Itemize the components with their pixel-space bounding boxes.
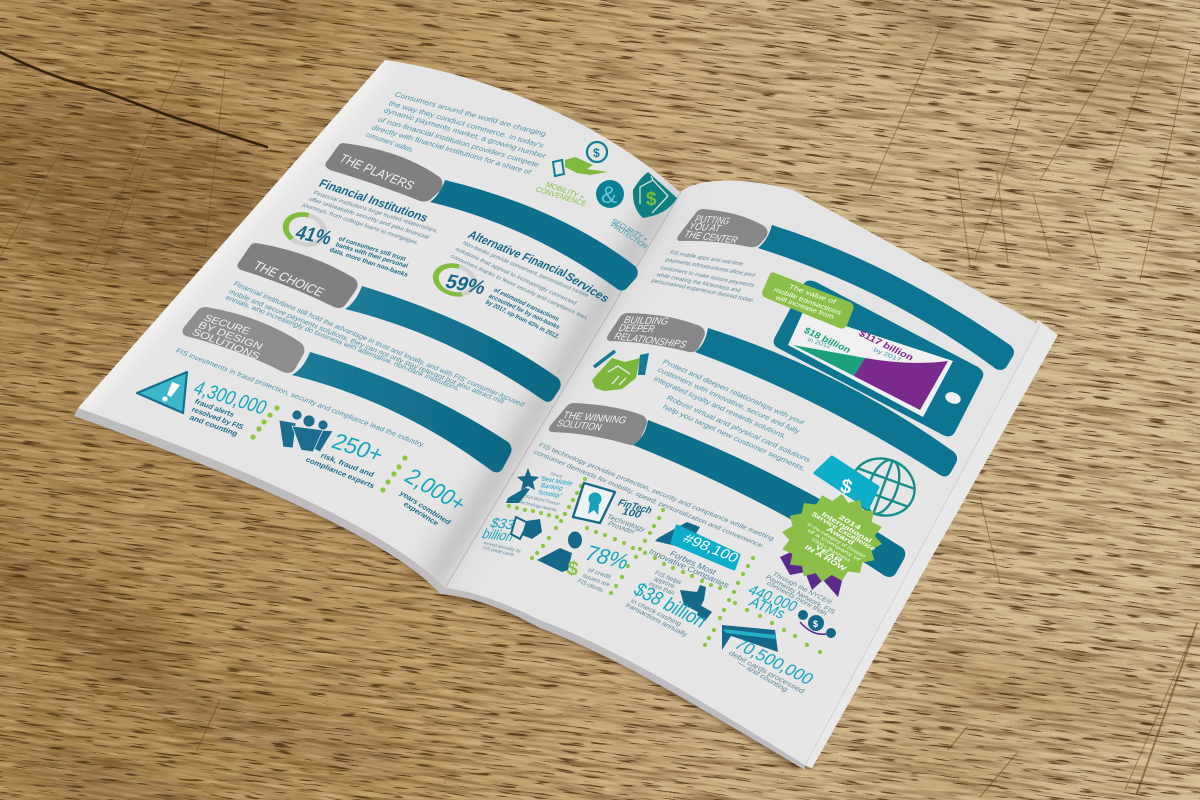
badge text: Award — [825, 526, 855, 547]
stat: 33 billion moved by credit cards — [479, 516, 523, 557]
callout: value of mobile transactions: mobile transactions — [772, 287, 843, 317]
label: security and protection: PROTECTION — [609, 222, 649, 250]
section tab: putting you at the center — [677, 209, 768, 247]
text block: building deeper relationships: customers with innovative, secure and fully — [656, 366, 802, 435]
intro text: Consumers around the world are changing — [393, 91, 548, 138]
icon: tablet with award ribbon — [573, 483, 615, 523]
text: fintech 100: Provider — [606, 520, 638, 536]
stat: 78 percent of credit issuers: issuers are — [581, 573, 612, 588]
dotted divider — [380, 455, 408, 493]
stat: 2,000 plus years: years combined — [398, 489, 453, 526]
badge text: 2500+ Business — [810, 537, 853, 563]
stat: 38 billion: transactions annually. — [624, 602, 690, 639]
text: through the nyce network: connects more than — [765, 580, 829, 617]
chart area: 117 billion — [854, 358, 948, 410]
stat: 33 billion moved by credit cards: $33 — [487, 516, 517, 533]
panel: right page — [479, 209, 1014, 695]
text block: the winning solution — [532, 442, 776, 550]
icon: atm location pins — [798, 610, 836, 638]
text block: putting you at the center — [650, 250, 757, 304]
stat text: 41 percent: of consumers still trust — [337, 236, 408, 263]
icon: group of people — [279, 410, 333, 452]
section tab: secure by design solutions — [182, 307, 304, 373]
stat: 440,000 atms: 440,000 — [745, 582, 801, 615]
text: fintech 100: 100 — [620, 507, 644, 521]
icon: dollar card — [815, 457, 878, 508]
stat: 78 percent of credit issuers: FIS clients. — [576, 578, 606, 594]
text: fis investments: FIS investments in fraud protection, security and compliance lead the industry. — [174, 347, 427, 449]
section bar: the players — [430, 180, 638, 290]
text block: building deeper relationships: help you target new customer segments. — [661, 403, 807, 473]
stat text: 59 percent: accounted for by non-banks — [487, 293, 561, 331]
label box: number 98,100: #98,100 — [680, 530, 742, 565]
label: mobility and convenience: CONVENIENCE — [534, 185, 588, 208]
section tab: secure by design solutions: BY DESIGN — [195, 320, 264, 352]
section bar: putting you at the center — [758, 225, 1014, 370]
stat text: 59 percent: by 2017, up from 43% in 2012. — [484, 299, 561, 340]
section tab: putting you at the center: THE CENTER — [681, 230, 740, 246]
donut chart: 41 percent — [274, 203, 336, 256]
stat: 250 plus experts: 250+ — [328, 428, 388, 467]
text: best mobile banking technology award: 2014 World Finance — [523, 493, 561, 506]
stat: 78 percent of credit issuers — [576, 541, 634, 594]
stat: 4,300,000 fraud alerts — [188, 378, 271, 438]
section bar: the winning solution — [633, 420, 905, 577]
text: fis helps approve: more than — [647, 581, 676, 597]
icon: ampersand circle: & — [601, 182, 617, 209]
subsection: alternative financial services — [449, 228, 613, 322]
section tab: building deeper relationships — [607, 313, 705, 352]
icon: trophy star — [506, 468, 539, 503]
icon: ampersand circle — [596, 180, 624, 209]
chart area: 18 billion — [793, 345, 865, 376]
section tab: building deeper relationships: DEEPER — [617, 323, 657, 335]
text block: the winning solution: consumer demands for mobility, speed, personalization and convenience. — [532, 449, 766, 550]
label: 18 billion: $18 billion — [802, 325, 853, 355]
section bar: the choice — [345, 286, 561, 402]
section tab: secure by design solutions: SECURE — [201, 313, 252, 337]
icon: house — [655, 522, 700, 550]
section tab: the players — [325, 143, 442, 202]
icon: credit card in hand — [511, 517, 542, 539]
label: 117 billion — [857, 328, 916, 364]
text block: building deeper relationships: Robust virtual and physical card solutions — [665, 394, 813, 464]
icon: dollar card: $ — [837, 475, 855, 499]
badge text: of a Company of — [806, 528, 863, 562]
text block: building deeper relationships — [652, 358, 813, 473]
text block: putting you at the center: while creating the frictionless and — [654, 272, 742, 294]
stat: 70,500,000 debit cards: — and counting — [736, 660, 790, 693]
text block: the choice: Financial institutions still hold the advantage in trust and loyalty, and with FIS' consumer-focused — [232, 280, 526, 408]
text: fis helps approve: FIS helps — [653, 570, 684, 586]
stat: 4,300,000 fraud alerts: and counting — [188, 413, 240, 438]
badge ribbon — [780, 550, 843, 597]
section bar: secure by design — [292, 352, 512, 472]
stat: 38 billion: $38 billion — [629, 579, 711, 632]
section bar: building deeper relationships — [695, 328, 957, 476]
subsection: financial institutions: journeys, from college loans to mortgages. — [300, 202, 420, 247]
subsection: alternative financial services: solutions that appeal to increasingly connected — [454, 247, 578, 307]
badge starburst — [772, 488, 892, 588]
stat text: 59 percent — [484, 287, 561, 340]
icon: thumbs up — [680, 585, 712, 621]
intro text: consumers' wallets. — [364, 131, 416, 154]
text: fintech 100: Technology — [605, 513, 648, 533]
stat: 250 plus experts: compliance experts — [304, 455, 377, 490]
section tab: putting you at the center: PUTTING — [693, 215, 732, 227]
brochure cast shadow — [72, 400, 800, 772]
text: best mobile banking technology award: Technology" — [536, 489, 563, 500]
section tab: the choice: THE CHOICE — [250, 258, 328, 299]
icon: atm location pins: $ — [813, 619, 818, 629]
badge text: 2014 — [837, 514, 863, 532]
badge text: IN A ROW — [803, 544, 848, 573]
badge text: YEAR — [813, 544, 844, 565]
badge text — [803, 511, 877, 573]
section tab: building deeper relationships: RELATIONSHIPS — [611, 332, 689, 351]
section tab: secure by design solutions: SOLUTIONS — [189, 327, 262, 362]
stat: 70,500,000 debit cards: 70,500,000 — [730, 634, 818, 688]
stat text: 59 percent: of estimated transactions — [492, 287, 561, 323]
icon: security shield with dollar: $ — [646, 189, 657, 210]
icon: security shield with dollar — [633, 172, 677, 218]
label: security and protection: SECURITY + — [610, 218, 649, 244]
text: fintech 100 — [605, 498, 654, 536]
brochure open pages — [78, 60, 1040, 765]
text block: putting you at the center: payments infrastructures allow your — [664, 257, 757, 279]
dotted dividers: award grid — [507, 477, 822, 654]
label: 18 billion: in 2012 — [806, 337, 832, 350]
stat: 33 billion moved by credit cards: billion — [479, 527, 516, 545]
stat: 78 percent of credit issuers: of credit — [586, 567, 613, 581]
section tab: building deeper relationships: BUILDING — [622, 315, 670, 327]
text: fis helps approve — [647, 570, 684, 597]
text: best mobile banking technology award: "Best Mobile — [538, 475, 574, 488]
section tab: the winning solution: THE WINNING — [561, 411, 628, 426]
subsection: financial institutions — [300, 176, 440, 247]
stat text: 41 percent: data, more than non-banks — [328, 247, 410, 279]
brochure back sheets — [74, 320, 1058, 770]
badge text: Service Excellence — [810, 511, 877, 553]
text: forbes most innovative companies: Innovative Companies — [647, 547, 731, 590]
intro text: dynamic payments market, a growing number — [382, 107, 548, 160]
subsection: alternative financial services: Alternative Financial — [465, 228, 570, 280]
icon: business person with dollar — [537, 532, 582, 581]
stat: 70,500,000 debit cards: debit cards processed — [727, 649, 806, 695]
text block: building deeper relationships: integrated loyalty and rewards solutions. — [652, 375, 788, 440]
intro text: of non-financial institution providers compete — [376, 116, 541, 169]
stat: 33 billion moved by credit cards: FIS credit cards — [482, 545, 516, 557]
icon: debit cards — [722, 625, 778, 652]
stat: 2,000 plus years: 2,000+ — [400, 464, 472, 516]
intro text: directly with financial institutions for a share of — [370, 124, 533, 176]
stat: 2,000 plus years: experience — [402, 500, 441, 527]
section tab: the winning solution: SOLUTION — [555, 419, 603, 433]
stat: 4,300,000 fraud alerts: 4,300,000 — [190, 378, 271, 419]
icon: warning triangle — [137, 372, 187, 413]
stat text: 41 percent: banks with their personal — [334, 242, 409, 270]
intro text — [364, 91, 548, 176]
stat: 250 plus experts — [304, 428, 388, 490]
stat: 33 billion moved by credit cards: moved annually by — [483, 540, 523, 554]
stat: 78 percent of credit issuers: 78% — [581, 541, 634, 574]
subsection: financial institutions: Financial Institutions — [316, 176, 431, 225]
text block: putting you at the center: personalized experience desired today. — [650, 278, 756, 304]
donut chart: 59 percent: 59% — [442, 271, 489, 299]
icon: business person with dollar: $ — [565, 557, 580, 581]
icon: hand holding dollar coin, mobility and convenience — [553, 142, 608, 176]
subsection: alternative financial services: Non-banks provide convenient, personalized mobile — [461, 241, 590, 299]
callout: value of mobile transactions — [762, 272, 854, 329]
icon: hand holding dollar coin, mobility and convenience: $ — [593, 146, 600, 160]
text: forbes most innovative companies: Forbes Most — [668, 549, 719, 577]
subsection: financial institutions: Financial institutions forge trusted relationships, — [312, 191, 440, 235]
dotted divider — [250, 405, 280, 440]
intro text: the way they conduct commerce. In today's — [387, 100, 546, 150]
stat: 250 plus experts: risk, fraud and — [319, 451, 376, 479]
stat: 38 billion: in check cashing — [629, 598, 683, 628]
donut chart: 59 percent — [424, 254, 489, 306]
section tab: the choice — [237, 243, 358, 308]
text block: the choice: ennials, who increasingly do business with alternative, non-bank institutions. — [224, 294, 462, 393]
badge text: International — [820, 511, 873, 545]
stat: 4,300,000 fraud alerts: fraud alerts — [193, 397, 236, 419]
text block: putting you at the center: customers to make secure payments — [659, 265, 755, 289]
subsection: financial institutions: offer unbeatable security and plan financial — [307, 197, 430, 241]
subsection: alternative financial services: Services — [562, 270, 613, 305]
donut chart: 41 percent: 41% — [292, 222, 335, 249]
callout: value of mobile transactions: The value of — [787, 284, 837, 306]
section tab: putting you at the center: YOU AT — [687, 222, 723, 235]
label: mobility and convenience: MOBILITY + — [544, 180, 587, 202]
label: 117 billion: $117 billion — [857, 328, 916, 362]
text: fis helps approve: approve — [652, 576, 677, 590]
text: through the nyce network: Through the NYCE® — [771, 570, 834, 606]
badge text: in the category of Division — [806, 522, 867, 559]
text: through the nyce network: Payments Network, FIS — [764, 574, 837, 616]
icon: globe — [843, 450, 923, 524]
phone graphic with chart — [774, 281, 983, 436]
panel: left page — [137, 91, 677, 527]
section tab: the players: THE PLAYERS — [336, 151, 418, 193]
label box: number 98,100 — [672, 526, 742, 569]
text: best mobile banking technology award: FIS won — [550, 471, 564, 479]
text: best mobile banking technology award: Banking — [539, 482, 564, 492]
section tab: the winning solution — [549, 403, 647, 445]
icon: handshake — [592, 351, 649, 391]
subsection: alternative financial services: consumers thanks to fewer security and compliance fees. — [449, 254, 590, 322]
text: fintech 100: FinTech — [615, 498, 654, 516]
text: best mobile banking technology award: Technology Awards. — [519, 499, 559, 513]
callout: value of mobile transactions: will increase from — [773, 294, 836, 321]
label: 117 billion: by 2017 — [872, 348, 903, 364]
text: best mobile banking technology award — [519, 471, 574, 513]
text block: the choice: mobile and secure payments solutions, they can not only stay relevant but also attract mill — [227, 288, 506, 406]
text block: building deeper relationships: Protect and deepen relationships with your — [661, 358, 807, 427]
stat: 4,300,000 fraud alerts: resolved by FIS — [190, 405, 246, 431]
award badge: international service excellence — [772, 488, 892, 597]
text block: the winning solution: FIS technology provides protection, security and compliance while meeting — [537, 442, 776, 543]
stat: 440,000 atms: ATMs — [746, 594, 789, 623]
text block: putting you at the center: FIS mobile apps and real-time — [668, 250, 744, 267]
